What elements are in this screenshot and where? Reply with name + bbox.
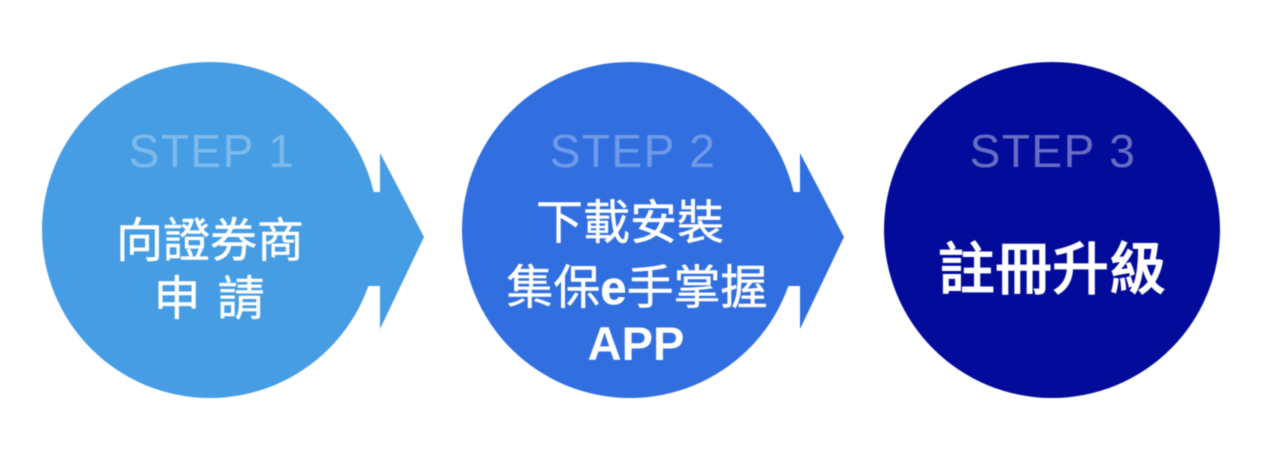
circle: step 3 bbox=[884, 62, 1220, 398]
circle: step 2 bbox=[462, 62, 798, 398]
panel: step 3 bbox=[884, 62, 1220, 398]
arrow: step 1 to step 2 bbox=[360, 153, 424, 329]
text: download and install: 下載安裝 bbox=[536, 196, 724, 249]
text: apply at broker: 向證券商 bbox=[116, 214, 304, 267]
panel: step 2 bbox=[462, 62, 844, 398]
text: register and upgrade: 註冊升級 bbox=[938, 238, 1166, 302]
label: STEP 3: STEP 3 bbox=[970, 125, 1136, 177]
label: STEP 1: STEP 1 bbox=[129, 125, 295, 177]
text: APP: APP bbox=[588, 317, 684, 370]
circle: step 1 bbox=[42, 62, 378, 398]
panel: step 1 bbox=[42, 62, 424, 398]
label: STEP 2: STEP 2 bbox=[550, 125, 716, 177]
arrow: step 2 to step 3 bbox=[780, 153, 844, 329]
text: app name: 集保e手掌握 bbox=[506, 261, 768, 314]
text: apply: 申 請 bbox=[153, 272, 267, 325]
